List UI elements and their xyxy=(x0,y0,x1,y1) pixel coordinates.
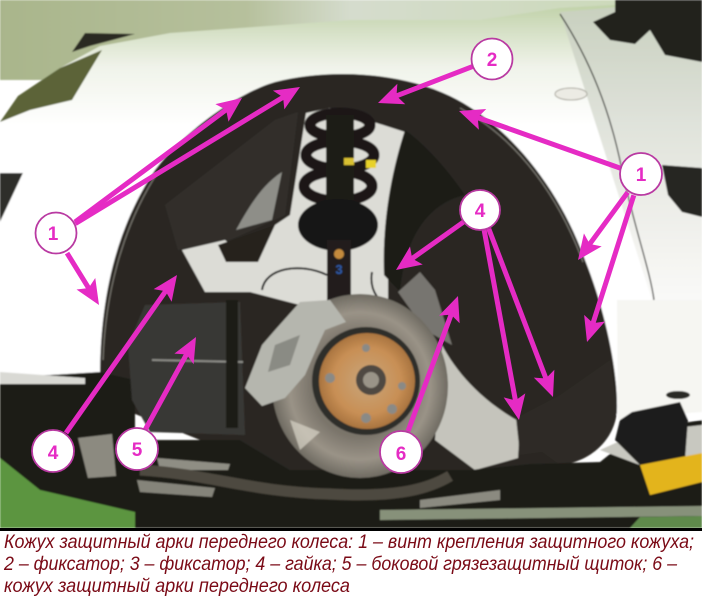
arrow: 5 to splash shield xyxy=(135,332,206,435)
arrow: 1 to left screw xyxy=(58,247,108,311)
callout 2: 2 xyxy=(487,50,497,71)
liner tab xyxy=(218,225,275,262)
arrow: 1 to arch top screw xyxy=(455,101,624,178)
undercarriage xyxy=(0,372,702,528)
bumper slot left xyxy=(0,173,23,222)
annotation arrows xyxy=(57,56,644,439)
liner right shading xyxy=(398,272,452,345)
liner rim highlight xyxy=(103,108,583,360)
front fender rear panel xyxy=(560,0,702,345)
arrow: 1 to top screw B xyxy=(70,78,306,233)
floor green right xyxy=(630,516,702,528)
callout 6 xyxy=(380,431,422,473)
dark strip above headlight xyxy=(72,33,135,52)
callout 1 left: 1 xyxy=(48,224,59,245)
lifting pad xyxy=(615,402,688,465)
strut body xyxy=(327,240,351,302)
arrow: 4 to nut near strut xyxy=(390,212,472,279)
callout 5: 5 xyxy=(132,440,143,461)
caliper shadow xyxy=(268,335,300,372)
liner left panel lighter xyxy=(165,112,298,250)
callout 4 bottom xyxy=(32,430,74,472)
callout 1 left xyxy=(36,212,76,254)
wheel studs xyxy=(325,344,406,423)
splash shield xyxy=(128,302,245,435)
number callouts xyxy=(32,38,662,473)
side mirror xyxy=(593,0,702,62)
left sill under strip xyxy=(0,372,85,384)
silver mesh below xyxy=(420,490,500,508)
engine silver part xyxy=(78,434,116,478)
side marker lamp xyxy=(555,88,587,100)
car body panels xyxy=(0,0,702,420)
callout 5 xyxy=(116,428,158,470)
arrow: 6 to arch liner xyxy=(398,292,468,435)
yellow lift arm xyxy=(640,453,702,495)
headlight xyxy=(0,50,102,122)
bumper slot right xyxy=(662,165,702,217)
caption line 3: кожух защитный арки переднего колеса xyxy=(4,576,350,597)
hub nut cap xyxy=(363,372,379,388)
panel seam line xyxy=(560,14,654,300)
spring centre shaft xyxy=(326,115,354,200)
upper silver bracket xyxy=(157,458,230,470)
callout 1 right: 1 xyxy=(636,165,647,186)
inner sill light area xyxy=(435,345,520,470)
workshop background xyxy=(0,0,702,80)
brake disc xyxy=(272,294,448,478)
callout 6: 6 xyxy=(396,444,406,465)
hub dark ring xyxy=(312,327,420,435)
floor strip xyxy=(380,506,702,520)
arrow: 1 to right screw xyxy=(569,186,637,267)
caption xyxy=(3,532,694,597)
mud flap xyxy=(516,360,617,465)
callout 4 top xyxy=(460,190,500,230)
black divider under photo xyxy=(0,528,702,531)
shield highlight xyxy=(152,360,243,362)
liner reflection streak xyxy=(236,172,282,230)
left sill xyxy=(0,170,110,370)
liner right inner curve xyxy=(384,130,465,292)
callout 2 xyxy=(472,38,512,80)
arrow: 4 to lower nut B xyxy=(479,225,563,401)
arrow: 4 to lower nut A xyxy=(473,228,530,422)
disc glare xyxy=(290,420,320,450)
hub xyxy=(319,333,415,429)
strut bay light area xyxy=(182,108,405,305)
yellow mark left xyxy=(344,158,354,165)
shield bracket xyxy=(226,300,238,428)
exhaust pipe xyxy=(140,470,450,495)
spring and strut xyxy=(298,113,378,302)
callout 1 right xyxy=(620,153,662,195)
arrow: 4 to left nut xyxy=(57,269,186,439)
floor green xyxy=(0,458,135,528)
right sill dark slot xyxy=(666,391,690,399)
spring seat xyxy=(298,199,378,251)
brake caliper xyxy=(245,300,346,406)
right sill xyxy=(617,300,702,420)
callout 4 top: 4 xyxy=(475,201,486,222)
wheel arch liner xyxy=(100,74,617,480)
spring coils xyxy=(304,113,374,201)
caption line 2: 2 – фиксатор; 3 – фиксатор; 4 – гайка; 5 – боковой грязезащитный щиток; 6 – xyxy=(3,554,677,575)
right sill lower shade xyxy=(600,425,702,465)
brake hose xyxy=(262,268,392,310)
strut blue number: 3 xyxy=(335,262,343,277)
lower silver bracket xyxy=(137,480,215,497)
callout 4 bottom: 4 xyxy=(48,443,59,464)
strut orange dot xyxy=(334,249,344,259)
arrow: 2 to clip xyxy=(374,56,478,113)
arrow: 1 to lower right screw xyxy=(577,192,644,345)
yellow mark right xyxy=(366,160,376,168)
hub centre nut xyxy=(356,365,386,395)
arrow: 1 to top screw A xyxy=(68,89,249,231)
